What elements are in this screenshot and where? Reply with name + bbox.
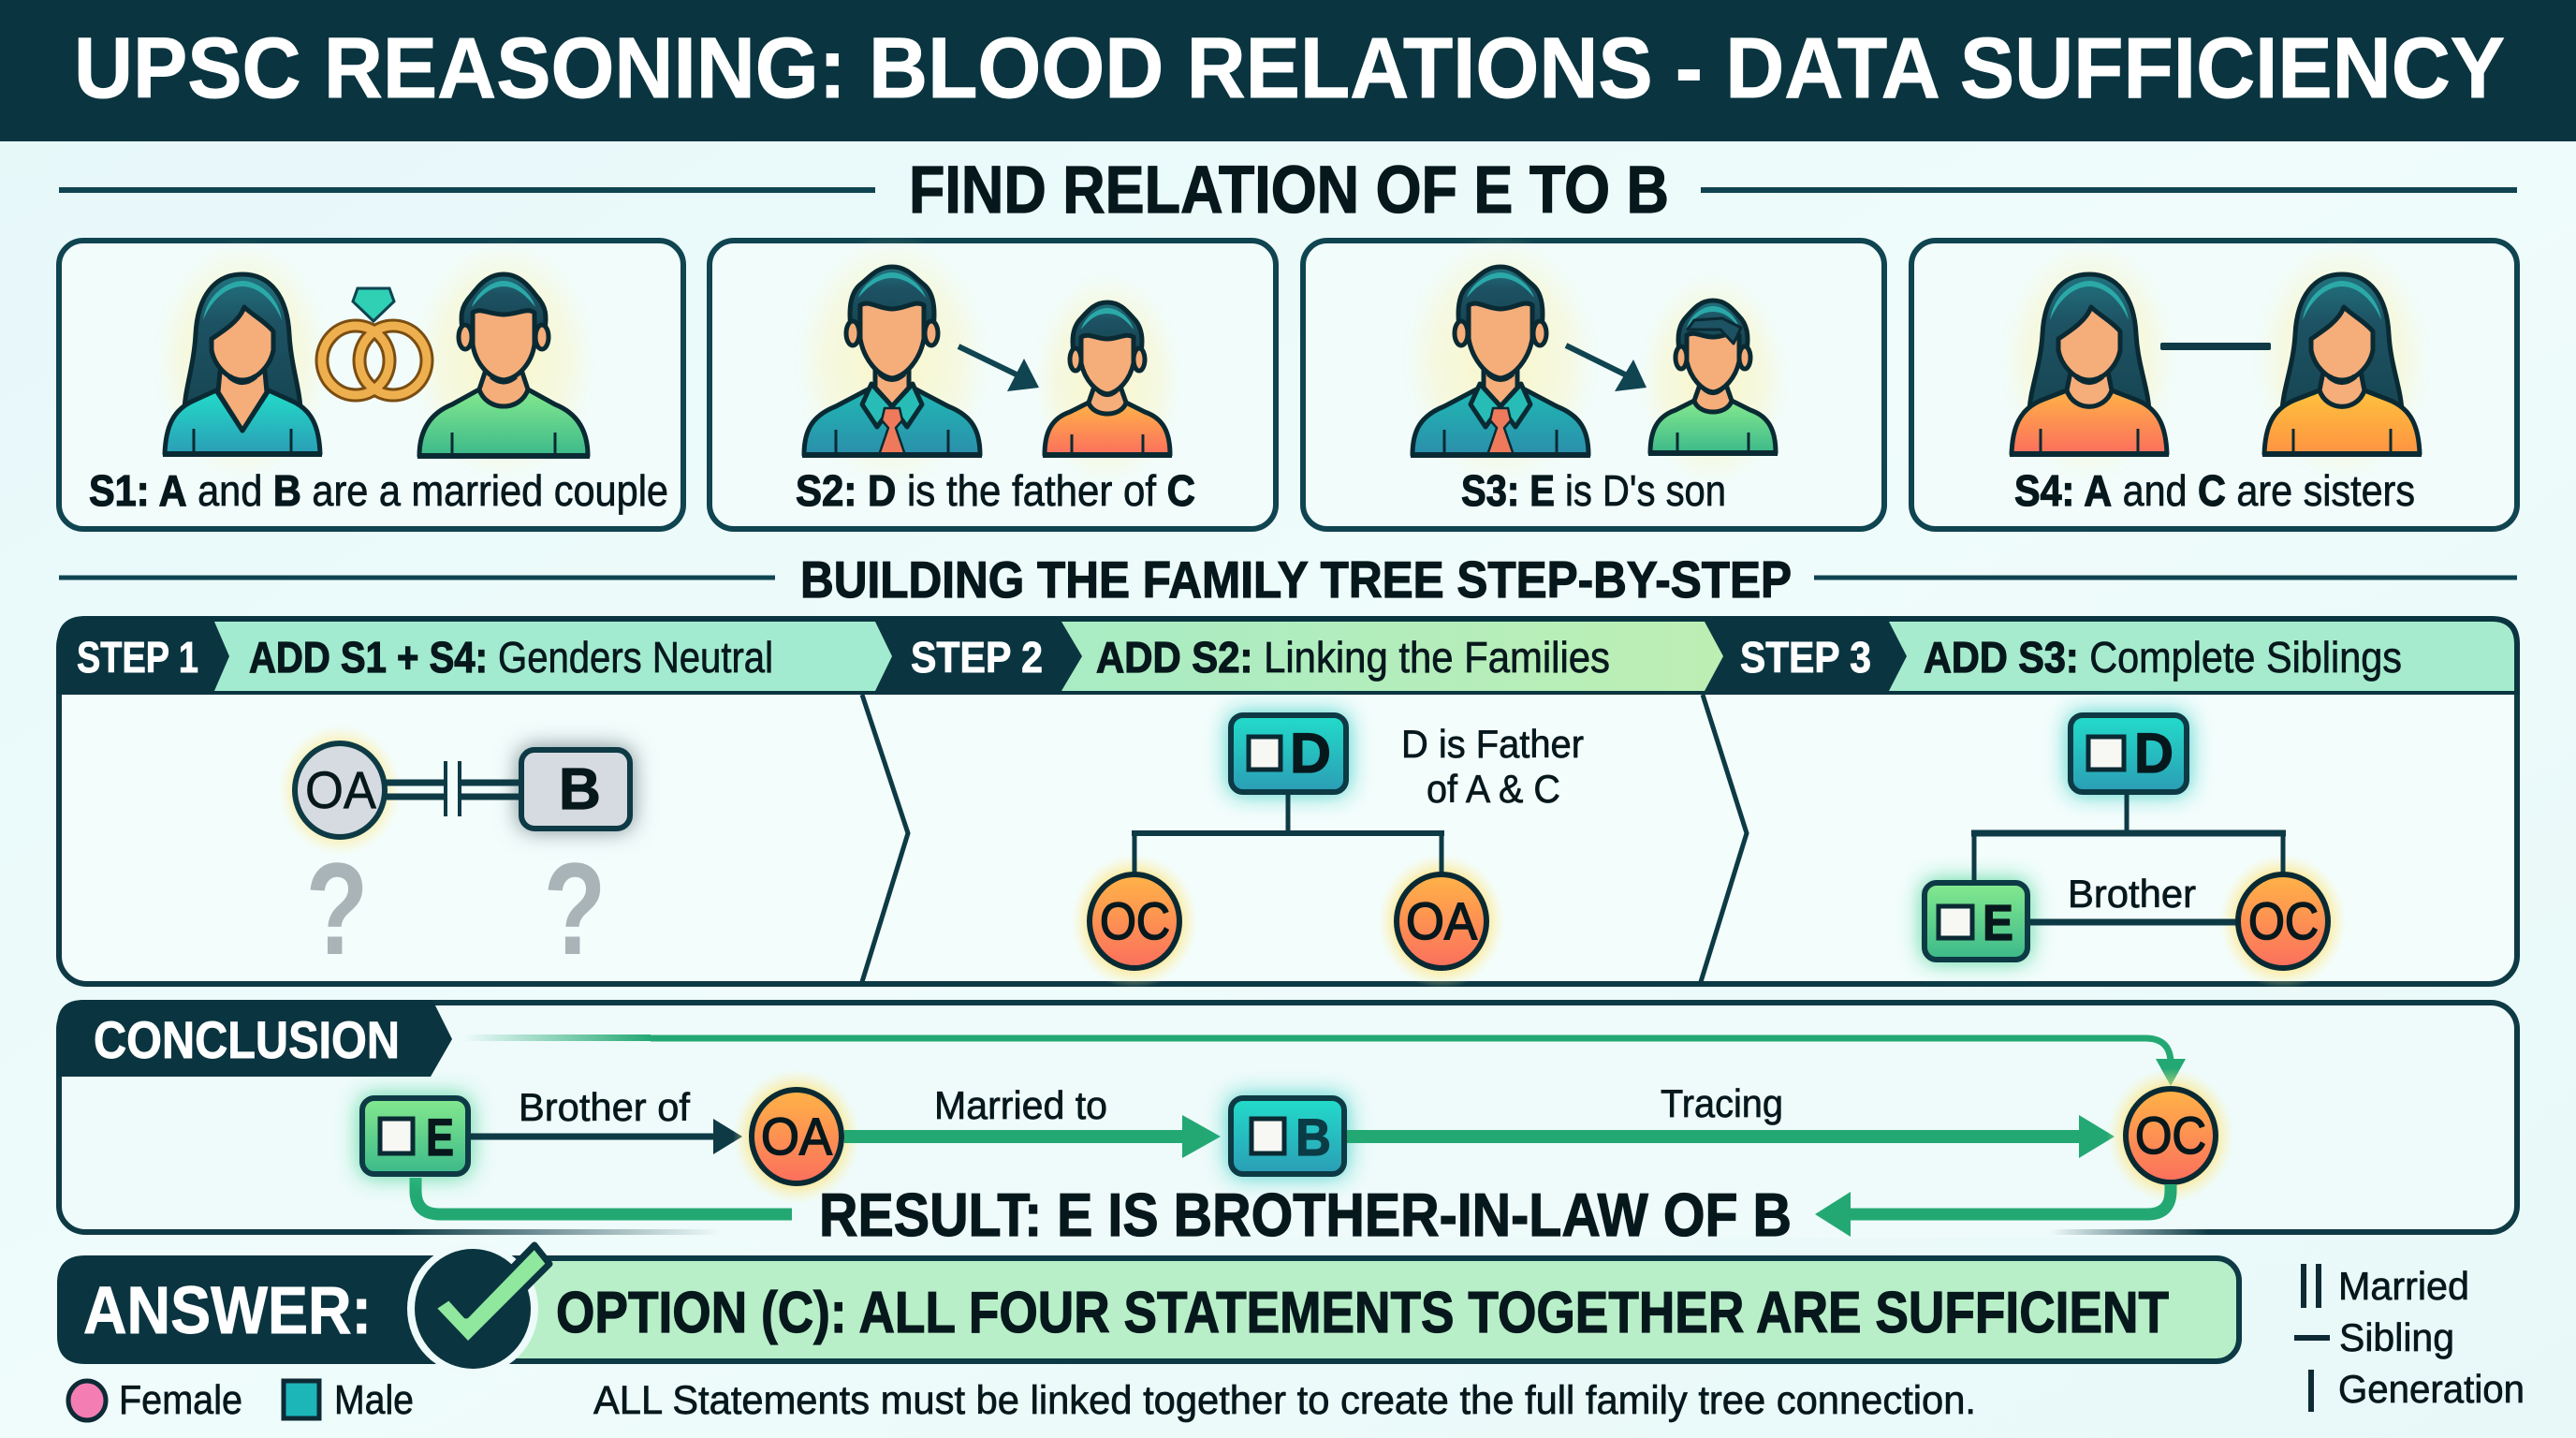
icon: father D xyxy=(802,267,982,455)
step 2 diagram: D is Father xyxy=(1401,722,1584,766)
legend: line key xyxy=(2294,1264,2525,1412)
arrow: married to xyxy=(844,1083,1221,1158)
step header band: STEP 2 xyxy=(911,633,1043,682)
arrow: tracing: Tracing xyxy=(1661,1081,1783,1125)
step header band xyxy=(57,616,2520,695)
node: C xyxy=(2107,1068,2234,1203)
arrow: married to: Married to xyxy=(934,1083,1107,1127)
arrow: D to E xyxy=(1566,345,1647,391)
panel: conclusion xyxy=(57,1000,2517,1249)
step 1 diagram: ? xyxy=(543,835,607,982)
step 3 diagram: E xyxy=(1983,895,2013,951)
panel: statement S3 xyxy=(1303,234,1884,529)
node: B: B xyxy=(1295,1108,1331,1167)
step header band: ADD S1 + S4: Genders Neutral xyxy=(249,633,773,682)
step 1 diagram xyxy=(278,725,633,982)
statement text S4: S4: A and C are sisters xyxy=(2014,466,2415,515)
statement text S1: S1: A and B are a married couple xyxy=(89,466,668,515)
step dividers xyxy=(861,695,1747,985)
panel: statement S4 xyxy=(1911,239,2517,529)
step 1 diagram: OA xyxy=(305,760,377,819)
node: B xyxy=(1228,1095,1347,1177)
step 2 diagram: of A & C xyxy=(1427,767,1560,811)
icon: check mark xyxy=(407,1242,549,1375)
icon: sister C xyxy=(2262,274,2422,454)
icon: man B xyxy=(417,274,590,456)
heading: find relation: FIND RELATION OF E TO B xyxy=(909,154,1669,227)
step 2 diagram: OC xyxy=(1100,891,1170,950)
conclusion tag xyxy=(57,1000,452,1077)
heading: building the family tree: BUILDING THE FAMILY TREE STEP-BY-STEP xyxy=(800,550,1792,609)
step 1 diagram: B xyxy=(559,757,601,822)
statement text S3: S3: E is D's son xyxy=(1461,466,1726,515)
icon: child C xyxy=(1043,302,1172,455)
legend: line key: Sibling xyxy=(2339,1315,2454,1359)
step header band: STEP 1 xyxy=(77,633,198,682)
arrow: brother of: Brother of xyxy=(519,1085,690,1129)
legend: gender key: Female xyxy=(119,1377,242,1423)
arrow: tracing xyxy=(1347,1081,2115,1158)
icon: father D xyxy=(1411,267,1590,455)
step header band: STEP 3 xyxy=(1740,633,1871,682)
panel: step by step family tree xyxy=(57,616,2520,989)
sibling line xyxy=(2160,343,2271,350)
conclusion tag: CONCLUSION xyxy=(94,1010,400,1069)
title banner: UPSC REASONING: BLOOD RELATIONS - DATA SUFFICIENCY xyxy=(74,21,2505,116)
path: E down to result xyxy=(416,1178,792,1214)
icon: wedding rings xyxy=(322,288,427,395)
legend: gender key: Male xyxy=(334,1377,414,1423)
step 1 diagram: ? xyxy=(305,835,369,982)
arrow: C back to result xyxy=(1815,1184,2171,1237)
step 2 diagram xyxy=(1071,712,1584,989)
arrow: brother of xyxy=(471,1085,742,1154)
answer bar: OPTION (C): ALL FOUR STATEMENTS TOGETHER ARE SUFFICIENT xyxy=(556,1281,2169,1345)
title banner xyxy=(0,0,2576,141)
statement text S2: S2: D is the father of C xyxy=(796,466,1195,515)
footnote: ALL Statements must be linked together to create the full family tree connection. xyxy=(593,1378,1976,1423)
step header band: ADD S2: Linking the Families xyxy=(1096,633,1610,682)
answer bar xyxy=(57,1242,2239,1375)
step 2 diagram: D xyxy=(1290,722,1331,785)
node: E: E xyxy=(426,1108,454,1167)
node: C: OC xyxy=(2135,1106,2206,1165)
legend: line key: Generation xyxy=(2338,1367,2525,1411)
arrow: D to C xyxy=(959,346,1039,391)
arrow: top path to C xyxy=(463,1034,2186,1086)
icon: sister A xyxy=(2010,274,2169,454)
panel: statement S2 xyxy=(710,234,1276,529)
panel: statement S1 xyxy=(59,239,683,529)
step header band: ADD S3: Complete Siblings xyxy=(1924,633,2402,682)
icon: son E xyxy=(1648,301,1778,453)
step 2 diagram: OA xyxy=(1406,891,1478,950)
node: E xyxy=(359,1095,471,1177)
step 3 diagram xyxy=(1922,712,2347,989)
node: A xyxy=(733,1069,860,1204)
result text: RESULT: E IS BROTHER-IN-LAW OF B xyxy=(819,1181,1792,1249)
step 3 diagram: Brother xyxy=(2068,872,2196,916)
legend: gender key xyxy=(68,1377,414,1423)
legend: line key: Married xyxy=(2338,1264,2469,1308)
step 3 diagram: OC xyxy=(2248,891,2319,950)
node: A: OA xyxy=(761,1107,833,1166)
icon: woman A xyxy=(163,274,322,454)
answer bar: ANSWER: xyxy=(83,1274,372,1348)
step 3 diagram: D xyxy=(2134,722,2174,785)
